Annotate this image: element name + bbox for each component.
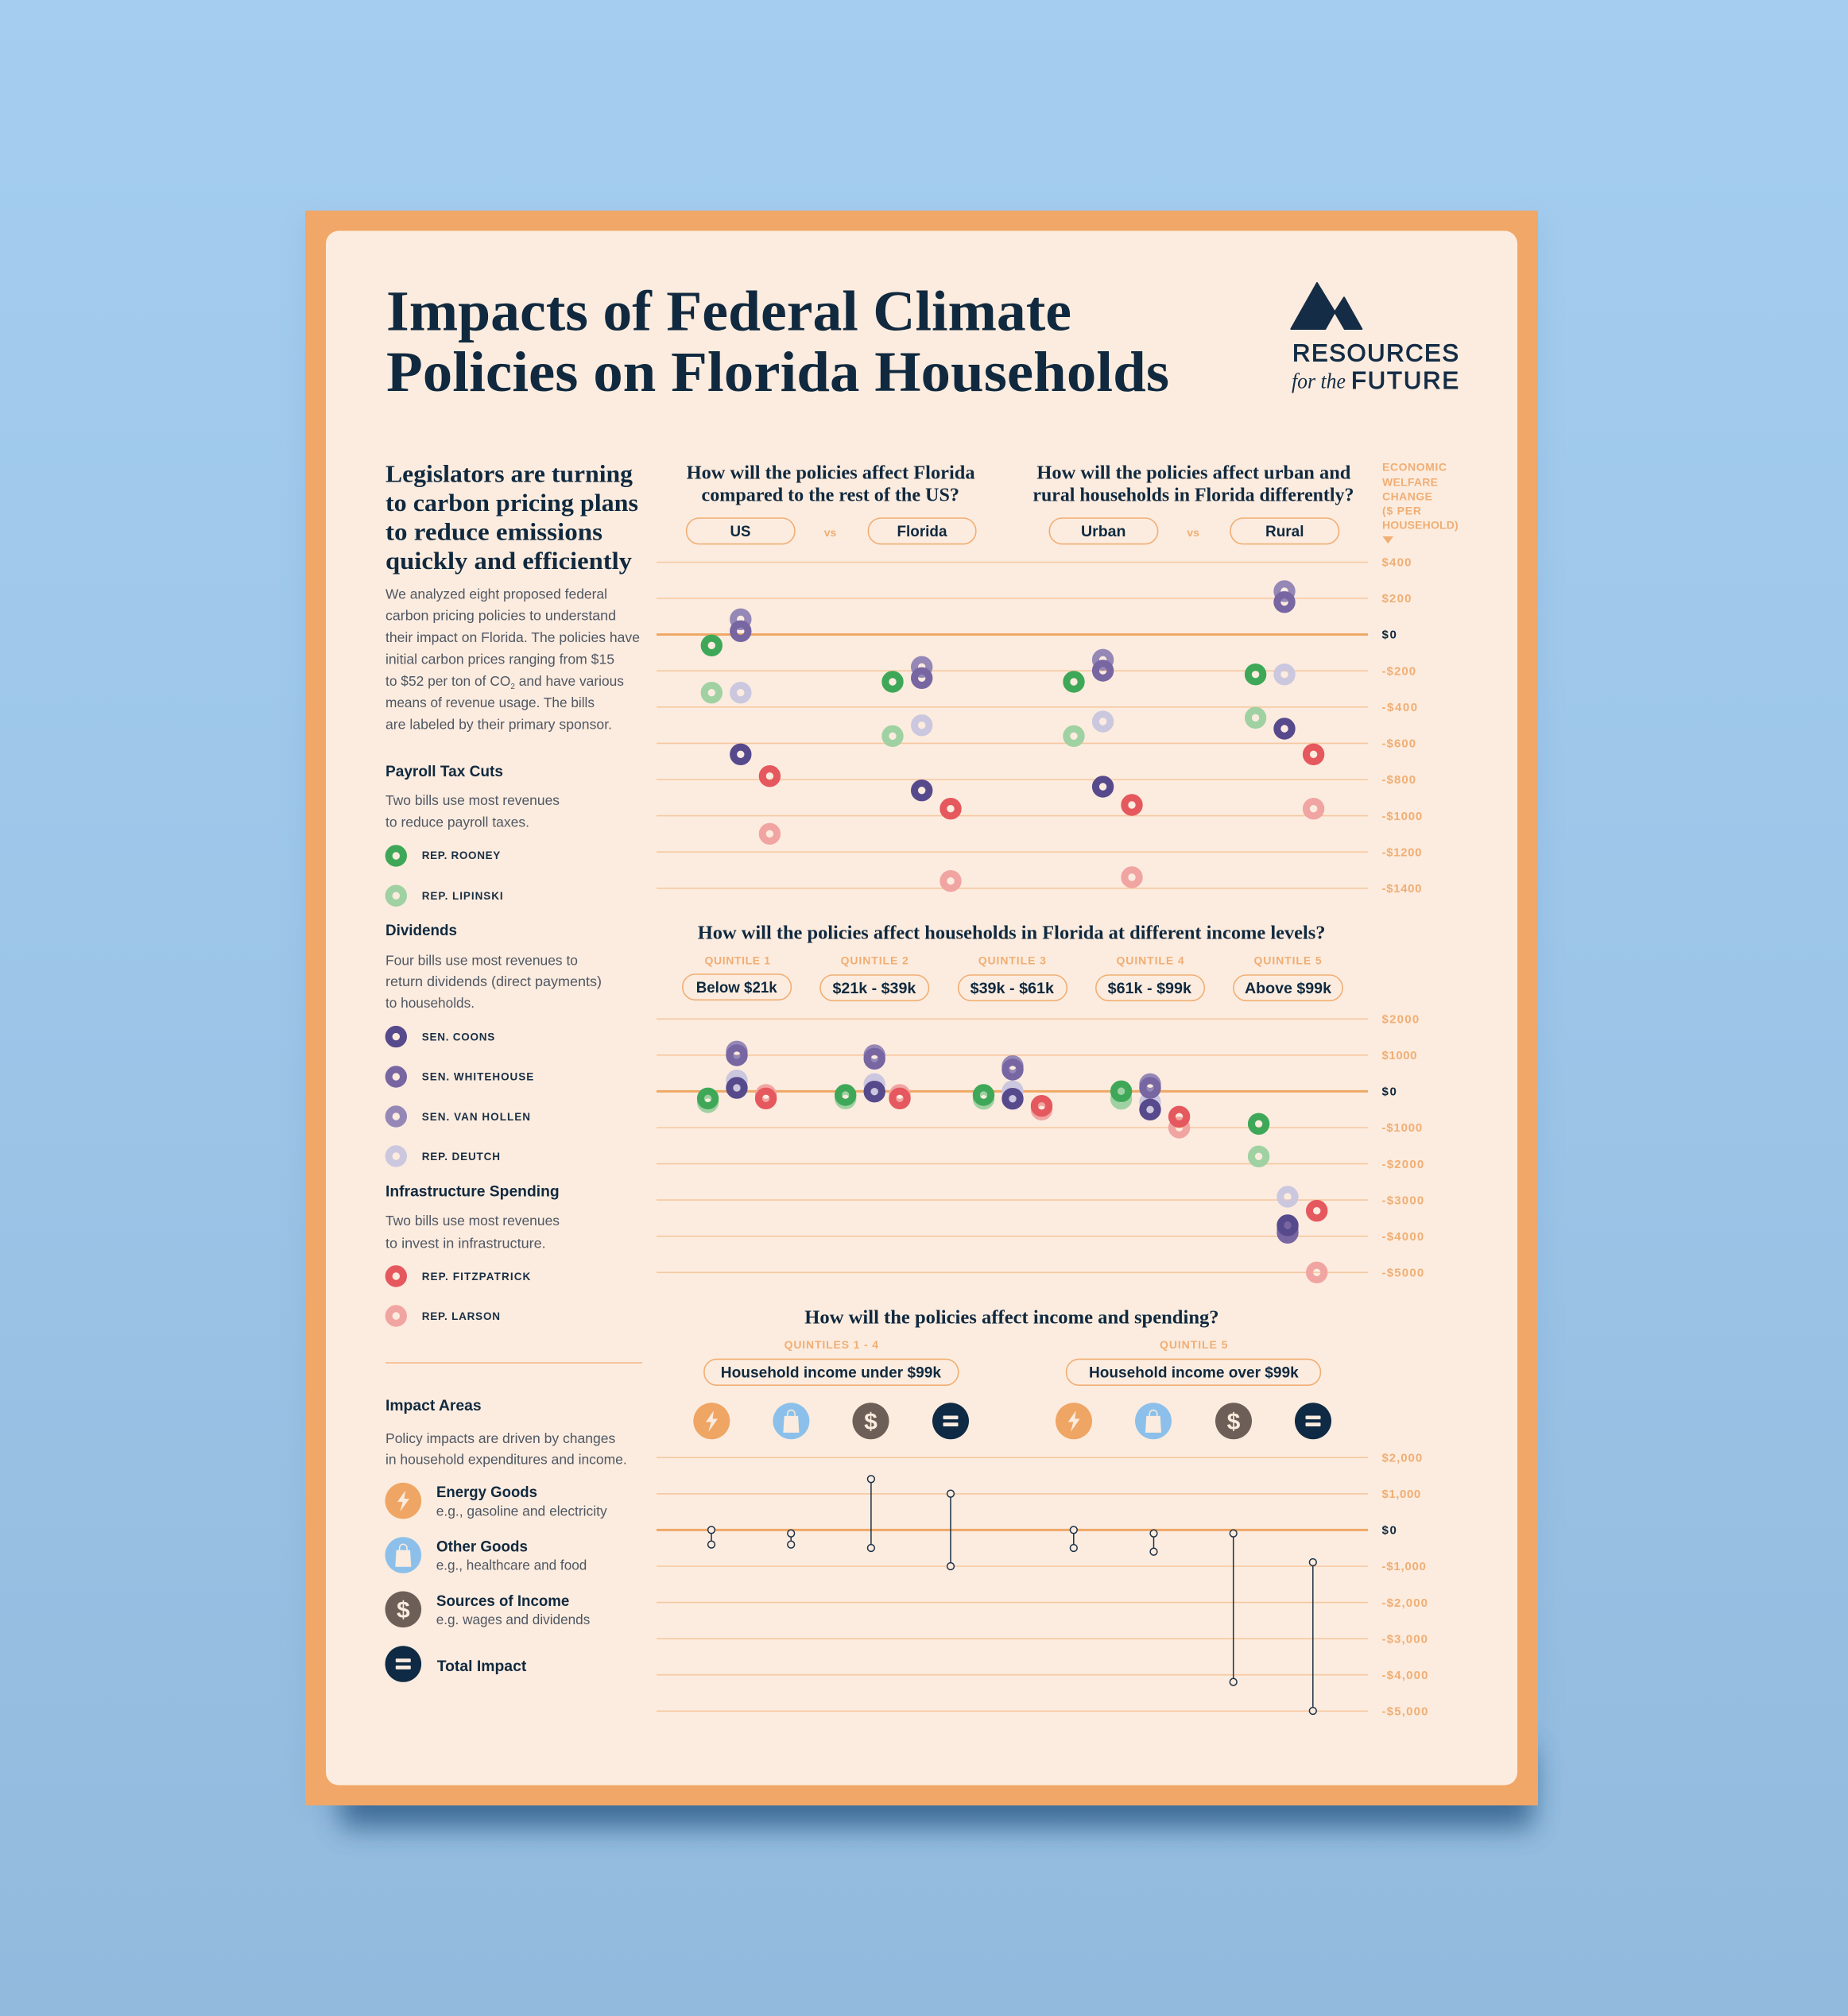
chart 2 axis labels: $2000 — [1381, 1012, 1419, 1027]
title: Policies on Florida Households — [386, 340, 1169, 404]
legend: impact areas: e.g., healthcare and food — [436, 1557, 587, 1573]
group labels and pills: income under and over $99k: Household income under $99k — [721, 1364, 941, 1382]
chart 3 axis labels: $1,000 — [1381, 1488, 1420, 1501]
range: total impact under $99k — [947, 1490, 954, 1569]
legend: infrastructure spending: REP. LARSON — [422, 1310, 500, 1322]
chart 1 axis labels: -$1200 — [1381, 845, 1421, 859]
quintile labels and pills: QUINTILE 2 — [841, 954, 909, 966]
headings and pills: urban vs rural: rural households in Florida differently? — [1032, 485, 1354, 505]
quintile labels and pills: QUINTILE 3 — [978, 954, 1046, 966]
intro body text: carbon pricing policies to understand — [385, 608, 616, 624]
legend: impact areas: Sources of Income — [436, 1592, 569, 1610]
intro body text: are labeled by their primary sponsor. — [385, 716, 612, 732]
legend: impact areas: $ — [397, 1597, 410, 1623]
intro heading: Legislators are turning — [385, 460, 633, 488]
legend: impact areas: e.g., gasoline and electricity — [436, 1503, 607, 1519]
chart 1 axis labels: $400 — [1381, 556, 1412, 570]
chart 2 axis labels: -$2000 — [1381, 1158, 1424, 1171]
headings and pills: US vs Florida — [687, 462, 976, 544]
dots: Florida — [885, 660, 958, 888]
logo: Resources for the Future: FUTURE — [1351, 366, 1459, 394]
chart 1: Florida vs US and urban vs rural — [657, 556, 1422, 896]
group labels and pills: income under and over $99k: Household income over $99k — [1089, 1364, 1299, 1382]
dots: US — [704, 612, 777, 842]
chart 3 axis labels — [1381, 1451, 1428, 1718]
legend: payroll tax cuts: to reduce payroll taxes. — [385, 814, 529, 830]
headings and pills: urban vs rural: Urban — [1081, 523, 1125, 540]
dots: quintile 1 — [700, 1044, 773, 1109]
legend: dividends: to households. — [385, 995, 475, 1011]
legend: dividends: REP. DEUTCH — [422, 1151, 500, 1163]
chart 1 axis labels: $0 — [1381, 629, 1397, 642]
legend: impact areas: e.g. wages and dividends — [436, 1612, 591, 1627]
quintile labels and pills: $39k - $61k — [970, 980, 1054, 997]
legend: payroll tax cuts — [385, 763, 560, 903]
headings and pills: urban vs rural: Rural — [1265, 523, 1304, 540]
headings and pills: urban vs rural: vs — [1187, 526, 1199, 539]
legend: infrastructure spending: REP. FITZPATRICK — [422, 1271, 531, 1283]
dots: quintile 2 — [838, 1048, 907, 1106]
chart 3: income and spending ranges — [657, 1451, 1428, 1718]
heading: income and spending: How will the policies affect income and spending? — [804, 1307, 1219, 1328]
chart 3 axis labels: $2,000 — [1381, 1451, 1422, 1465]
legend: infrastructure spending: Infrastructure Spending — [385, 1183, 560, 1201]
impact icons: over $99k: $ — [1227, 1409, 1241, 1435]
chart 1 axis labels: $200 — [1381, 592, 1412, 606]
logo: Resources for the Future: for the — [1292, 369, 1346, 393]
legend: impact areas: Other Goods — [436, 1538, 528, 1556]
legend: dividends: SEN. VAN HOLLEN — [422, 1111, 530, 1123]
legend: infrastructure spending — [385, 1183, 560, 1323]
chart 3 axis labels: -$4,000 — [1381, 1669, 1428, 1682]
legend: payroll tax cuts: REP. ROONEY — [422, 849, 500, 861]
legend: impact areas: in household expenditures and income. — [385, 1452, 627, 1468]
chart 3 axis labels: -$5,000 — [1381, 1705, 1428, 1718]
intro body text — [385, 586, 640, 732]
poster cream panel — [326, 230, 1517, 1785]
chart 2 axis labels: -$5000 — [1381, 1267, 1424, 1279]
legend: impact areas — [385, 1397, 627, 1682]
group labels and pills: income under and over $99k: QUINTILES 1 - 4 — [785, 1338, 878, 1351]
group labels and pills: income under and over $99k: QUINTILE 5 — [1160, 1338, 1228, 1351]
legend: dividends: SEN. COONS — [422, 1031, 494, 1043]
chart 3 axis labels: -$2,000 — [1381, 1596, 1428, 1610]
legend: dividends — [385, 922, 602, 1163]
chart 3 axis labels: -$3,000 — [1381, 1632, 1428, 1646]
range: other goods over $99k — [1150, 1530, 1157, 1555]
range: energy goods over $99k — [1070, 1527, 1077, 1551]
legend: impact areas: Policy impacts are driven by changes — [385, 1430, 616, 1446]
quintile labels and pills: Below $21k — [696, 979, 777, 996]
quintile labels and pills: Above $99k — [1245, 980, 1331, 997]
chart 2 axis labels: $1000 — [1381, 1049, 1416, 1062]
range: other goods under $99k — [788, 1530, 795, 1548]
legend: dividends: Dividends — [385, 922, 457, 939]
quintile labels and pills: $61k - $99k — [1108, 980, 1191, 997]
axis title: economic welfare change: ECONOMIC — [1382, 461, 1447, 474]
chart 2 axis labels: $0 — [1381, 1085, 1397, 1099]
axis title: economic welfare change — [1382, 461, 1459, 544]
chart 1 axis labels — [1381, 556, 1422, 896]
quintile labels and pills: QUINTILE 4 — [1116, 954, 1184, 966]
dots: Urban — [1067, 652, 1139, 884]
chart 2 axis labels — [1381, 1012, 1424, 1279]
title: Impacts of Federal Climate — [386, 280, 1071, 343]
quintile labels and pills — [683, 954, 1342, 1000]
heading: income levels: How will the policies affect households in Florida at different income levels? — [698, 923, 1326, 944]
headings and pills: US vs Florida: How will the policies affect Florida — [687, 462, 975, 483]
headings and pills: urban vs rural — [1032, 462, 1354, 544]
range: energy goods under $99k — [708, 1527, 715, 1548]
legend: payroll tax cuts: REP. LIPINSKI — [422, 890, 503, 902]
logo: Resources for the Future: RESOURCES — [1292, 339, 1459, 366]
legend: dividends: return dividends (direct payments) — [385, 973, 602, 989]
chart 1 axis labels: -$600 — [1381, 737, 1416, 751]
impact icons: under $99k — [693, 1403, 969, 1439]
range: sources of income under $99k — [868, 1476, 874, 1551]
axis title: economic welfare change: HOUSEHOLD) — [1382, 518, 1459, 531]
impact icons: over $99k — [1056, 1403, 1331, 1439]
legend: infrastructure spending: Two bills use most revenues — [385, 1213, 560, 1229]
group labels and pills: income under and over $99k — [704, 1338, 1320, 1385]
intro body text: 2 — [510, 683, 515, 691]
chart 3 axis labels: $0 — [1381, 1524, 1397, 1538]
intro heading: to reduce emissions — [385, 517, 602, 545]
legend: payroll tax cuts: Payroll Tax Cuts — [385, 763, 503, 780]
chart 2 axis labels: -$1000 — [1381, 1121, 1422, 1135]
dots: Rural — [1248, 584, 1321, 816]
intro body text: to $52 per ton of CO — [385, 673, 512, 689]
chart 1 axis labels: -$1000 — [1381, 810, 1422, 823]
intro body text: We analyzed eight proposed federal — [385, 586, 607, 602]
headings and pills: urban vs rural: How will the policies affect urban and — [1036, 462, 1351, 483]
chart 1 axis labels: -$400 — [1381, 701, 1417, 714]
title — [386, 280, 1169, 404]
impact icons: under $99k: $ — [864, 1409, 878, 1435]
intro body text: and have various — [515, 673, 624, 689]
chart 3 axis labels: -$1,000 — [1381, 1560, 1426, 1573]
legend: payroll tax cuts: Two bills use most revenues — [385, 792, 560, 808]
range: sources of income over $99k — [1230, 1530, 1237, 1685]
axis title: economic welfare change: WELFARE — [1382, 475, 1438, 488]
poster frame — [305, 211, 1538, 1805]
headings and pills: US vs Florida: compared to the rest of the US? — [701, 485, 959, 505]
intro body text: their impact on Florida. The policies have — [385, 629, 640, 645]
quintile labels and pills: $21k - $39k — [833, 980, 916, 997]
chart 2: income levels — [657, 1012, 1424, 1280]
headings and pills: US vs Florida: Florida — [897, 523, 947, 540]
axis title: economic welfare change: CHANGE — [1382, 490, 1432, 503]
axis title: economic welfare change: ($ PER — [1382, 504, 1421, 517]
headings and pills: US vs Florida: US — [730, 523, 750, 540]
chart 1 axis labels: -$800 — [1381, 773, 1416, 787]
legend: impact areas: Impact Areas — [385, 1397, 482, 1414]
chart 2 axis labels: -$3000 — [1381, 1194, 1424, 1207]
chart 1 axis labels: -$1400 — [1381, 882, 1421, 896]
legend: infrastructure spending: to invest in infrastructure. — [385, 1235, 546, 1251]
quintile labels and pills: QUINTILE 1 — [704, 954, 770, 966]
intro heading: to carbon pricing plans — [385, 489, 638, 517]
legend: impact areas: Energy Goods — [436, 1484, 537, 1501]
legend: dividends: Four bills use most revenues to — [385, 952, 578, 968]
dots: quintile 4 — [1114, 1077, 1187, 1135]
intro heading — [385, 460, 638, 575]
range: total impact over $99k — [1309, 1559, 1316, 1714]
legend: impact areas: Total Impact — [437, 1658, 527, 1675]
quintile labels and pills: QUINTILE 5 — [1254, 954, 1322, 966]
intro body text: means of revenue usage. The bills — [385, 695, 595, 710]
poster shadow — [302, 219, 1542, 1828]
headings and pills: US vs Florida: vs — [824, 526, 836, 539]
logo: Resources for the Future — [1291, 283, 1459, 394]
dots: quintile 3 — [976, 1058, 1049, 1117]
chart 2 axis labels: -$4000 — [1381, 1230, 1424, 1244]
intro body text: initial carbon prices ranging from $15 — [385, 652, 614, 667]
chart 1 axis labels: -$200 — [1381, 664, 1416, 678]
legend: dividends: SEN. WHITEHOUSE — [422, 1071, 533, 1083]
dots: quintile 5 — [1251, 1116, 1324, 1280]
intro heading: quickly and efficiently — [385, 547, 633, 575]
